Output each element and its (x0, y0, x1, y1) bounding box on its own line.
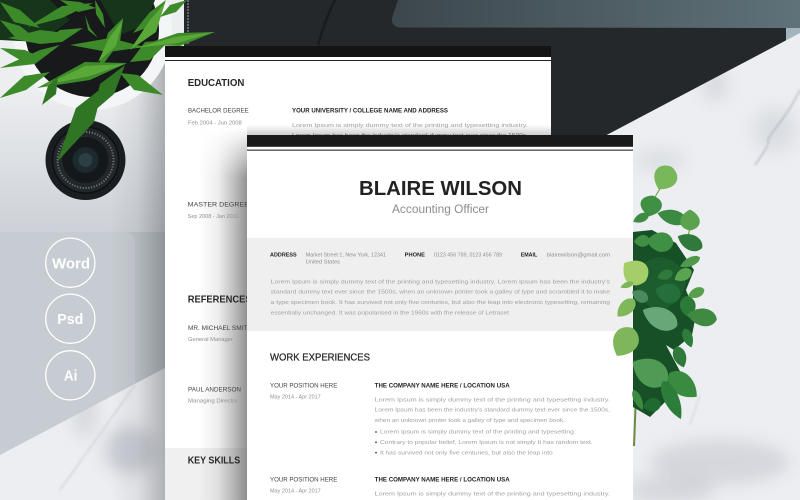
school details: Lorem Ipsum has been the industry's standard dummy text ever since the 1500s, (292, 133, 528, 139)
job entry one (270, 384, 610, 456)
contact panel: United States (306, 260, 340, 266)
plant blades (0, 0, 215, 162)
reference: paul anderson (188, 387, 241, 405)
degree: master: Sep 2008 - Jan 2011 (188, 214, 238, 220)
reference: michael smith (188, 326, 252, 343)
heading: key skills: KEY SKILLS (188, 455, 240, 466)
heading: references: REFERENCES (188, 295, 252, 306)
job entry two: THE COMPANY NAME HERE / LOCATION USA (375, 477, 510, 483)
job entry one: when an unknown printer took a galley of type and specimen book. (374, 418, 565, 424)
contact panel (247, 238, 633, 331)
name: BLAIRE WILSON (359, 178, 522, 200)
degree: bachelor (188, 109, 249, 126)
job entry one: It has survived not only five centuries, but also the leap into (380, 450, 553, 456)
job entry two: YOUR POSITION HERE (270, 477, 337, 483)
contact panel: a type specimen book. It has survived not only five centuries, but also the leap into electronic typesetting, remaining (271, 300, 610, 306)
school details: YOUR UNIVERSITY / COLLEGE NAME AND ADDRESS (292, 109, 448, 115)
back resume page (165, 46, 551, 500)
job entry one: Lorem Ipsum is simply dummy text of the printing and typesetting industry. (375, 397, 610, 403)
heading: education: EDUCATION (188, 78, 244, 89)
basil plant (606, 161, 718, 446)
format badges (46, 238, 95, 400)
contact panel: standard dummy text ever since the 1500s, when an unknown printer took a galley of type and scrambled it to make (271, 290, 610, 296)
badge: word: Word (52, 255, 90, 272)
icon: camera lens (46, 120, 126, 200)
job entry one: YOUR POSITION HERE (270, 384, 337, 390)
school details (292, 109, 528, 139)
badge: psd (46, 294, 95, 343)
contact panel: 0123 456 789, 0123 456 789 (434, 252, 502, 258)
badge: ai (46, 351, 95, 400)
job entry one: May 2014 - Apr 2017 (270, 395, 321, 401)
tablet edge top right (392, 0, 800, 28)
job entry two: May 2014 - Apr 2017 (270, 489, 321, 495)
badge: psd: Psd (57, 311, 83, 328)
job entry two: Lorem Ipsum is simply dummy text of the printing and typesetting industry. (375, 491, 610, 497)
job entry one: Contrary to popular belief, Lorem Ipsum is not simply It has random text. (380, 440, 593, 446)
job entry one: Lorem Ipsum is simply dummy text of the printing and typesetting. (380, 430, 576, 436)
badge: ai: Ai (64, 368, 77, 385)
job entry one: Lorem Ipsum has been the industry's standard dummy text ever since the 1500s, (375, 408, 610, 414)
tablet on desk (0, 232, 165, 500)
reference: michael smith: General Manager (188, 337, 233, 343)
contact panel: essentially unchanged. It was popularised in the 1960s with the release of Letraset (271, 310, 509, 316)
heading: work experiences: WORK EXPERIENCES (270, 353, 370, 364)
shadow of front page (198, 125, 551, 500)
degree: master: MASTER DEGREE (188, 203, 249, 209)
reference: michael smith: MR. MICHAEL SMITH (188, 326, 252, 332)
contact panel: ADDRESS (270, 252, 297, 258)
front resume page (247, 135, 633, 500)
degree: bachelor: Feb 2004 - Jun 2008 (188, 120, 242, 126)
reference: paul anderson: Managing Director (188, 399, 238, 405)
reference: paul anderson: PAUL ANDERSON (188, 387, 241, 393)
contact panel: PHONE (405, 252, 425, 258)
degree: bachelor: BACHELOR DEGREE (188, 109, 249, 115)
shadow of back page on desk (110, 46, 165, 500)
dark folder background (184, 0, 800, 300)
badge: word (46, 238, 95, 287)
plant pot (12, 0, 172, 110)
job entry two (270, 477, 610, 497)
job title: Accounting Officer (392, 204, 489, 216)
contact panel: Lorem Ipsum is simply dummy text of the printing and typesetting industry. Lorem Ipsum has been the industry's (271, 280, 610, 286)
contact panel: blairewilson@gmail.com (547, 252, 611, 258)
contact panel: Market Street 1, New York, 12341 (306, 252, 386, 258)
contact panel: EMAIL (521, 252, 538, 258)
job entry one: THE COMPANY NAME HERE / LOCATION USA (375, 384, 510, 390)
degree: master (188, 203, 249, 220)
school details: Lorem Ipsum is simply dummy text of the printing and typesetting industry. (292, 123, 528, 129)
